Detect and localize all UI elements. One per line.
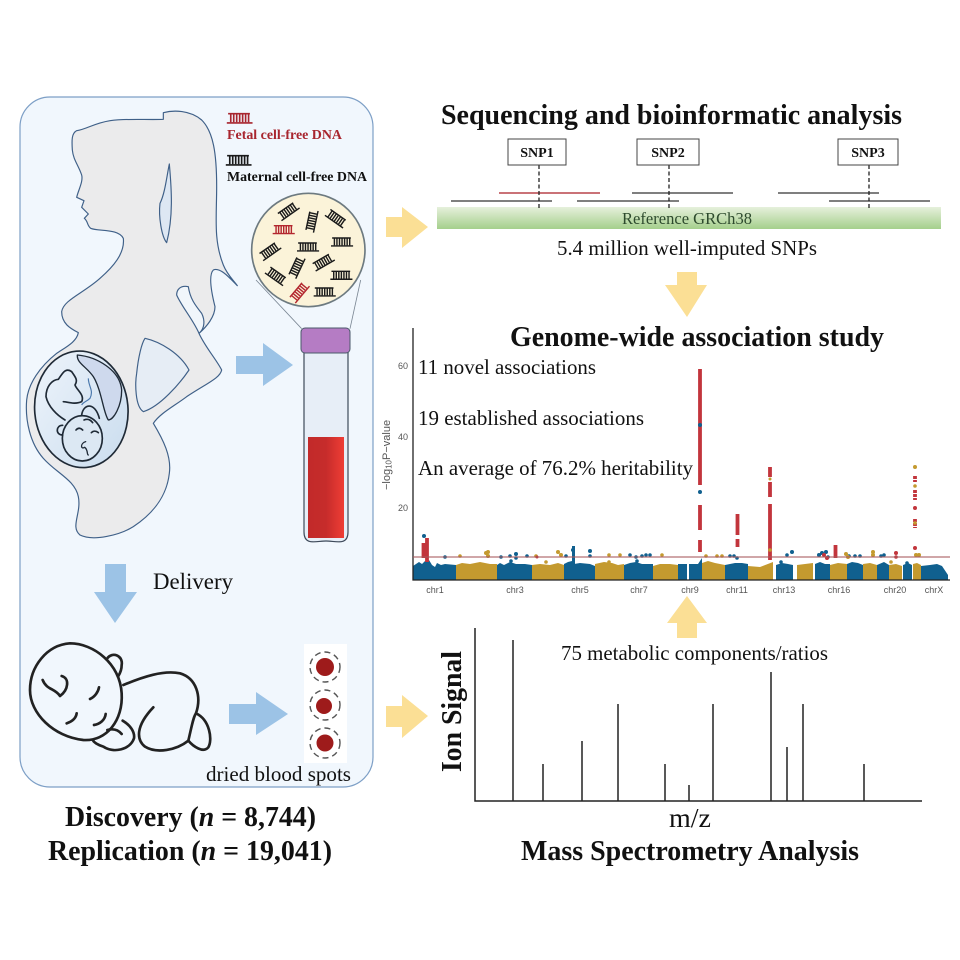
axis label: m/z: m/z — [669, 803, 711, 833]
legend: fetal cell-free DNA: Fetal cell-free DNA — [227, 128, 343, 143]
SNP3 box — [838, 139, 898, 165]
heading: mass spectrometry: Mass Spectrometry Analysis — [521, 836, 859, 867]
panel: maternal and newborn sampling — [20, 97, 373, 787]
chromosome labels: chr3 — [506, 585, 524, 595]
heading: replication cohort: Replication (n = 19,041) — [48, 836, 332, 867]
axis labels: 20 — [398, 503, 408, 513]
axis label: ion signal: Ion Signal — [437, 651, 468, 772]
blood collection tube — [301, 328, 350, 542]
axis labels — [381, 361, 408, 513]
axis labels: 40 — [398, 432, 408, 442]
reference bar — [437, 207, 941, 229]
text: GWAS results: 11 novel associations — [418, 355, 596, 379]
significant and sub-threshold points — [422, 423, 909, 565]
arrow: mother to blood tube — [236, 343, 293, 386]
dried blood spot card — [304, 644, 347, 763]
gold chromosome blocks — [456, 561, 921, 580]
upper arm — [160, 164, 171, 243]
chromosome labels — [426, 585, 943, 595]
chr11 peak — [736, 514, 739, 547]
chromosome labels: chr1 — [426, 585, 444, 595]
sequencing reads — [451, 193, 930, 201]
chromosome labels: chr20 — [884, 585, 906, 595]
illustration: pregnant woman silhouette — [26, 111, 237, 538]
axes — [413, 328, 950, 580]
label: delivery: Delivery — [153, 569, 233, 594]
legend: maternal cell-free DNA: Maternal cell-free DNA — [227, 170, 368, 185]
SNP3 box: SNP3 — [851, 146, 885, 161]
hand — [177, 286, 204, 333]
peaks — [424, 369, 915, 562]
arrow: dried spots to mass spectrometry — [386, 695, 428, 738]
fetus — [46, 370, 102, 461]
arrow: metabolites to GWAS — [667, 596, 707, 638]
arm gap — [136, 338, 189, 412]
heading: discovery cohort: Discovery (n = 8,744) — [65, 802, 316, 833]
genome-wide significance line — [413, 556, 950, 558]
chr13 peak — [768, 467, 772, 560]
chromosome labels: chr9 — [681, 585, 699, 595]
body outline — [26, 111, 237, 538]
text: GWAS results: 19 established associations — [418, 406, 644, 430]
label: dried blood spots: dried blood spots — [206, 762, 351, 786]
illustration: sleeping newborn — [30, 643, 210, 750]
blood — [308, 437, 344, 538]
callout: magnified DNA fragments — [252, 193, 365, 329]
axis labels: 60 — [398, 361, 408, 371]
chart: Manhattan plot — [381, 328, 950, 595]
heading: GWAS: Genome-wide association study — [510, 322, 884, 353]
womb — [30, 347, 133, 472]
chromosome labels: chr11 — [726, 585, 748, 595]
SNP1 box — [508, 139, 566, 165]
chart: mass spectrum — [475, 628, 922, 801]
chromosome labels: chr5 — [571, 585, 589, 595]
chromosome labels: chr7 — [630, 585, 648, 595]
chromosome labels: chr13 — [773, 585, 795, 595]
arrow: delivery — [94, 564, 137, 623]
SNP2 box: SNP2 — [651, 146, 685, 161]
chr1 peak — [424, 538, 427, 562]
chromosome labels: chrX — [925, 585, 943, 595]
chromosome labels: chr16 — [828, 585, 850, 595]
text: GWAS results — [418, 355, 693, 480]
diagram: SNP read alignment — [437, 139, 941, 229]
tube cap — [301, 328, 350, 353]
diagram: SNP read alignment: Reference GRCh38 — [622, 209, 752, 228]
label: metabolic components: 75 metabolic components/ratios — [561, 641, 828, 665]
axis labels: P−value — [381, 420, 393, 460]
SNP2 box — [637, 139, 699, 165]
text: GWAS results: An average of 76.2% heritability — [418, 456, 693, 480]
legend: fetal cell-free DNA — [227, 114, 343, 143]
label: imputed SNP count: 5.4 million well-imputed SNPs — [557, 236, 817, 260]
blue chromosome blocks — [413, 558, 948, 580]
umbilical cord — [82, 378, 91, 405]
tube body — [304, 350, 348, 542]
chr21 peak — [913, 476, 917, 528]
chr16 peak — [834, 545, 837, 558]
placenta — [77, 355, 122, 420]
arrow: SNPs to GWAS — [665, 272, 707, 317]
arrow: blood to sequencing — [386, 207, 428, 248]
axis labels: −log — [381, 469, 393, 490]
heading: sequencing: Sequencing and bioinformatic analysis — [441, 100, 902, 131]
arrow: newborn to dried blood spots — [229, 692, 288, 735]
legend: maternal cell-free DNA — [226, 156, 368, 185]
axis labels: 10 — [384, 459, 394, 469]
SNP1 box: SNP1 — [520, 146, 554, 161]
chr9 peak — [698, 369, 702, 552]
